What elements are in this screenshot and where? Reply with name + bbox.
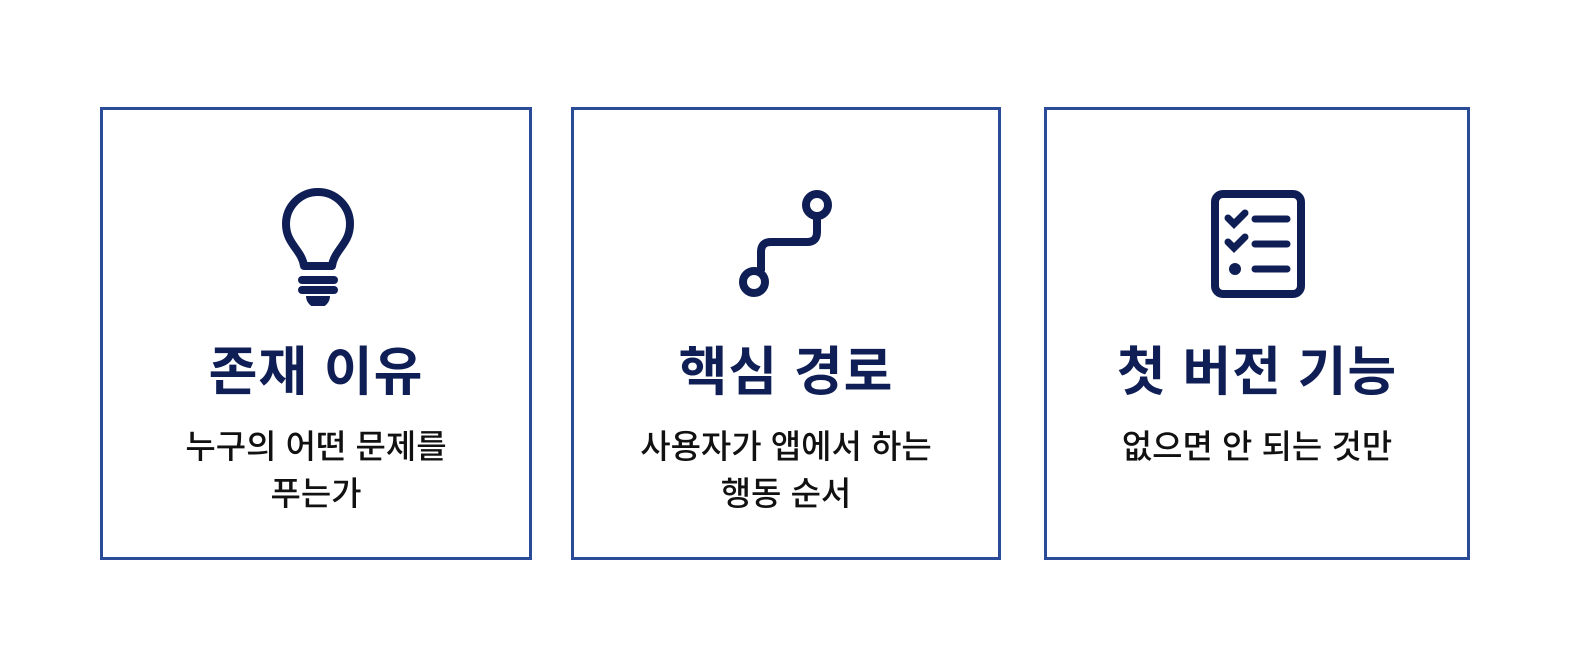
text [640,428,932,512]
text: 사용자가 앱에서 하는 [640,428,932,465]
text: 행동 순서 [721,475,851,512]
icon: route [739,190,832,297]
icon: checklist [1211,190,1305,298]
text [185,428,447,512]
title: 존재 이유 [209,343,423,402]
text: 없으면 안 되는 것만 [1122,428,1392,465]
text: 누구의 어떤 문제를 [185,428,447,465]
panel: first version [1044,107,1470,560]
icon: light bulb [282,188,354,306]
panel: reason [100,107,532,560]
title: 핵심 경로 [679,343,893,402]
panel: core path [571,107,1001,560]
text: 푸는가 [270,475,362,512]
title: 첫 버전 기능 [1117,343,1397,402]
